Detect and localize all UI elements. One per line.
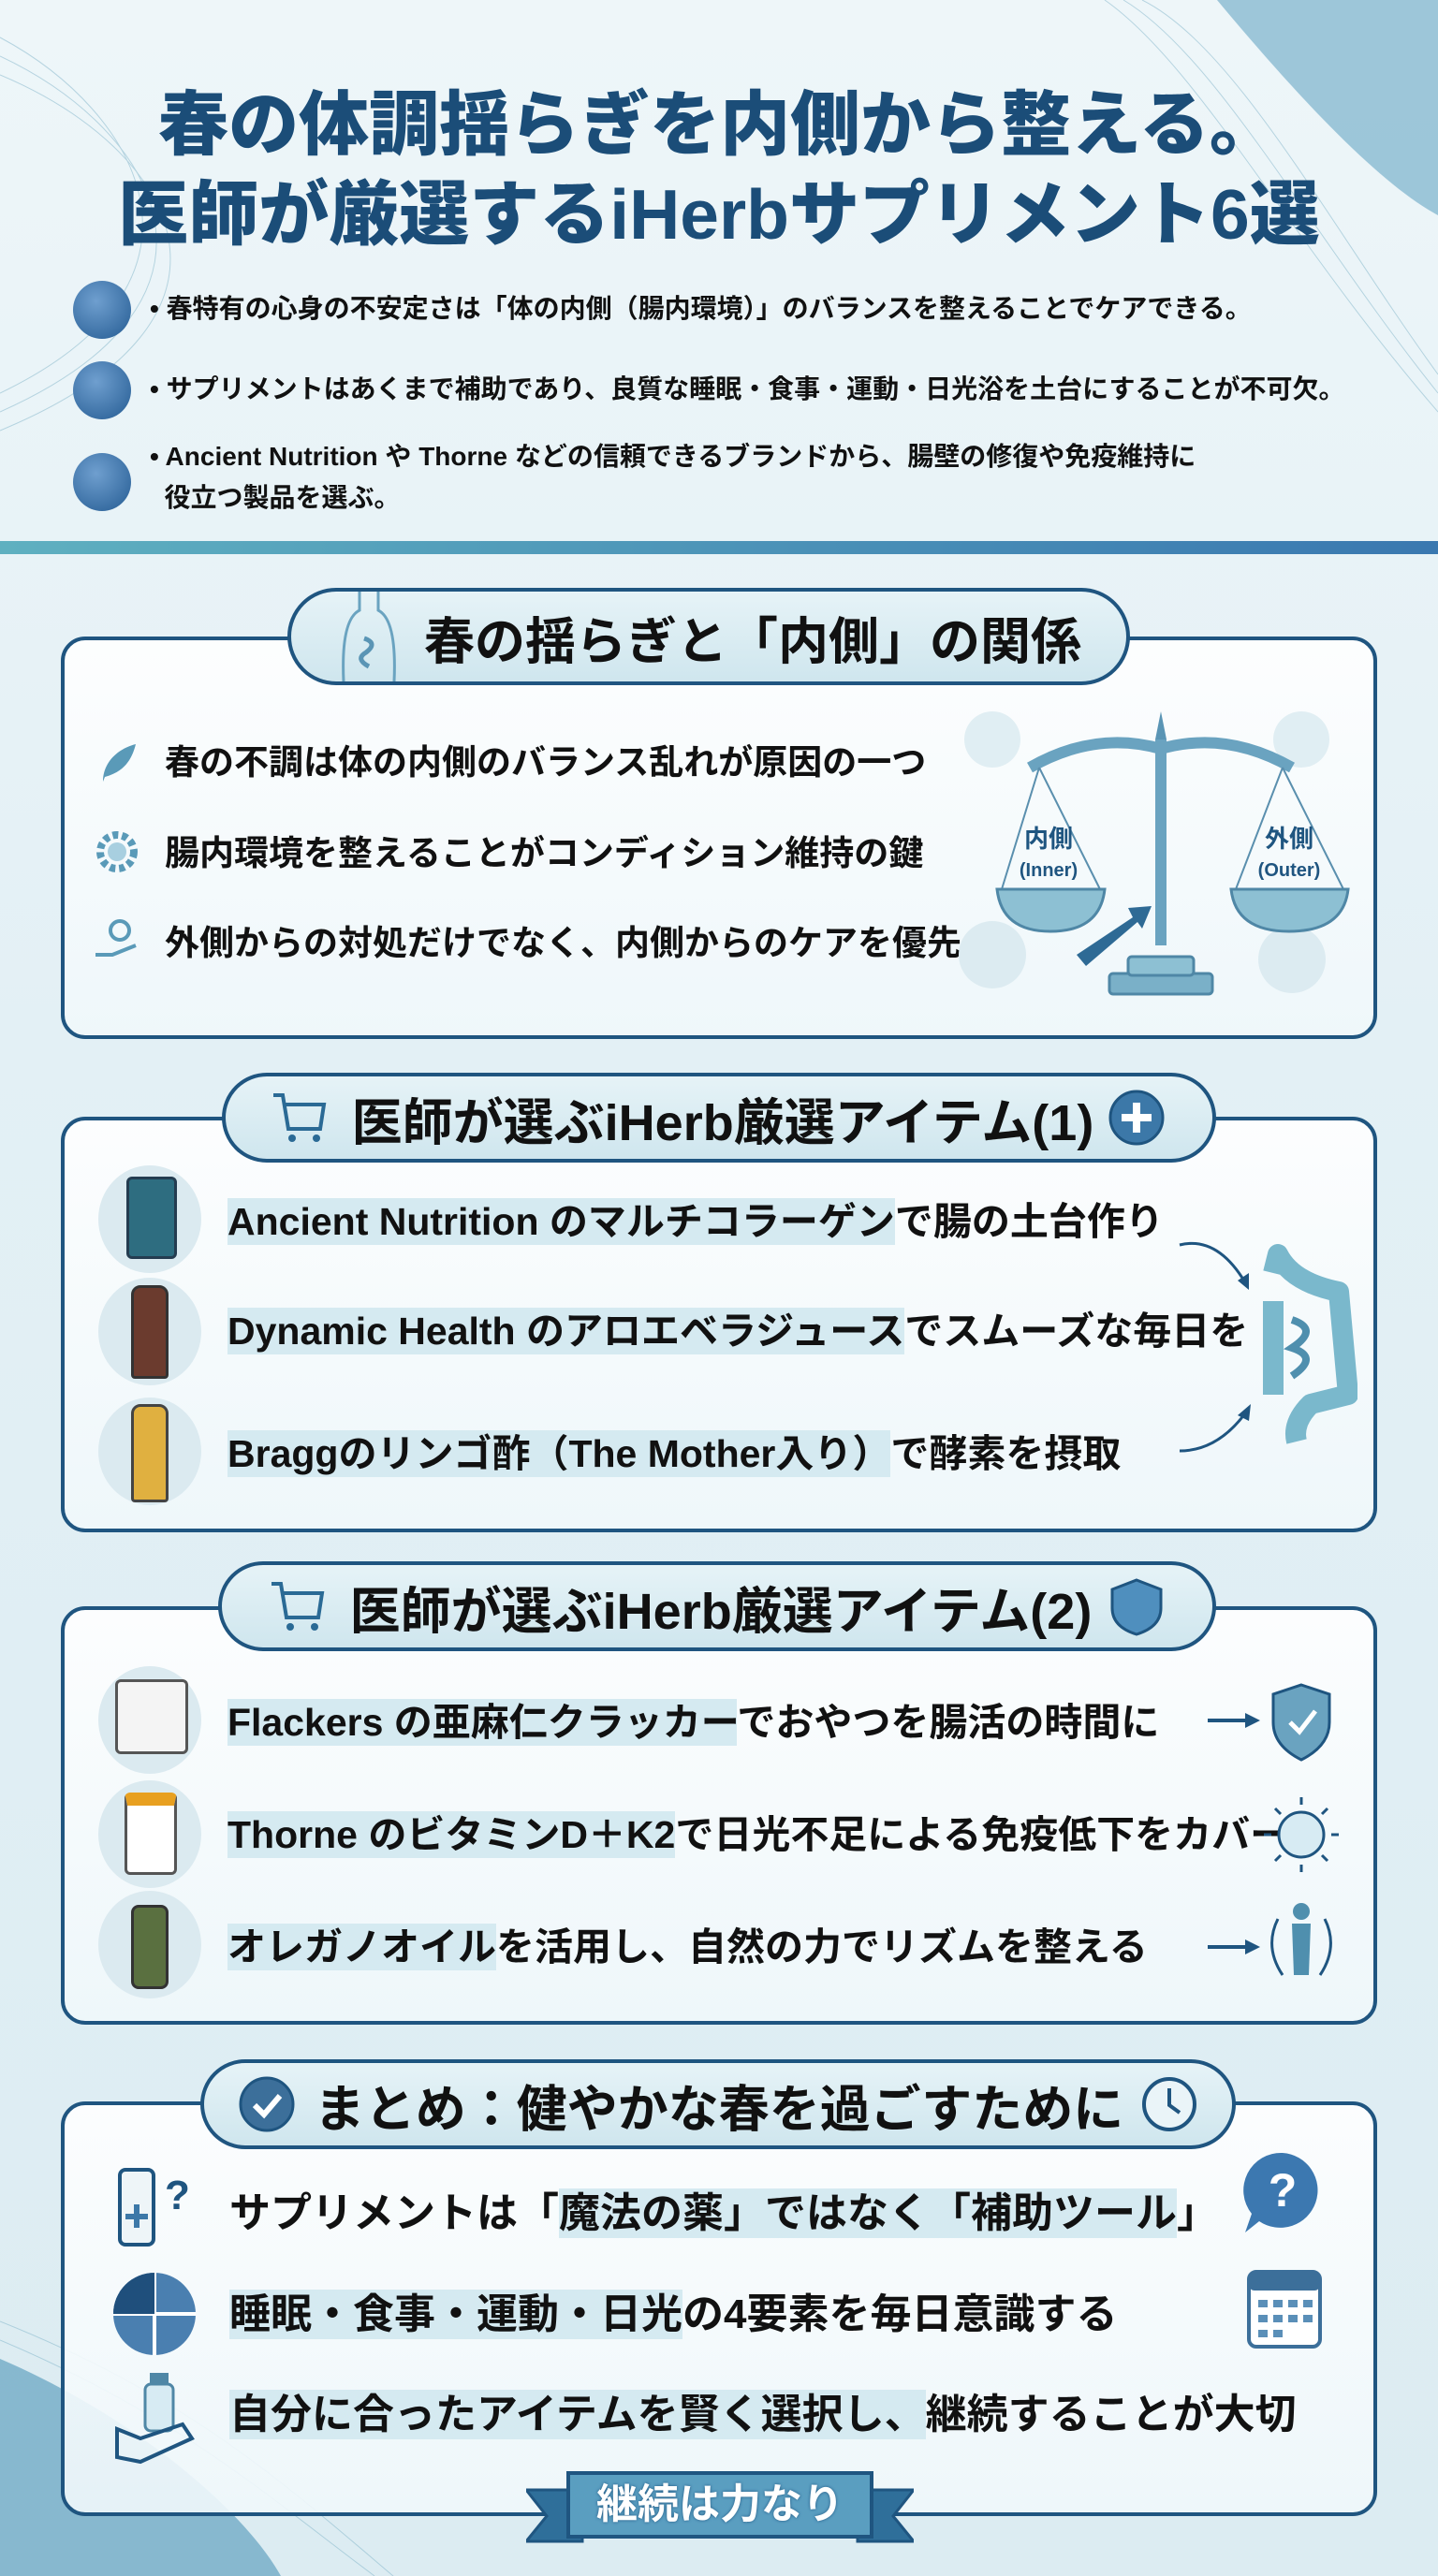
product 1 [98, 1165, 201, 1273]
summary rows [113, 2153, 1322, 2464]
icon plus [1108, 1090, 1165, 1146]
panel: items 2 [61, 1606, 1377, 2025]
heading pill 1: 春の揺らぎと「内側」の関係 [424, 614, 1081, 670]
scale illustration: 内側 [1024, 825, 1073, 853]
bullet 3: • Ancient Nutrition や Thorne などの信頼できるブランドから、腸壁の修復や免疫維持に [150, 442, 1196, 471]
rows panel 1 [95, 743, 961, 962]
icon gear [96, 831, 138, 872]
icon cart [273, 1093, 326, 1142]
scale illustration: (Outer) [1258, 860, 1320, 881]
heading pill 2 [222, 1073, 1216, 1163]
heading pill 2: 医師が選ぶiHerb厳選アイテム(1) [352, 1095, 1093, 1151]
text row 2: 腸内環境を整えることがコンディション維持の鍵 [165, 834, 923, 872]
panel: summary [61, 2101, 1377, 2516]
icon speech question [1243, 2153, 1318, 2232]
text row 1: 春の不調は体の内側のバランス乱れが原因の一つ [165, 743, 926, 782]
panel: inner relation [61, 637, 1377, 1039]
icon speech question: ? [1269, 2164, 1297, 2217]
text 5: Thorne のビタミンD＋K2で日光不足による免疫低下をカバー [227, 1813, 1288, 1856]
heading pill 3: 医師が選ぶiHerb厳選アイテム(2) [350, 1584, 1092, 1640]
icon shield [1110, 1578, 1163, 1636]
icon calendar [1247, 2270, 1322, 2349]
heading pill 4 [200, 2059, 1236, 2149]
product 4 [98, 1666, 201, 1774]
product 3 [98, 1398, 201, 1505]
text 6: オレガノオイルを活用し、自然の力でリズムを整える [227, 1925, 1148, 1969]
bullet 3: 役立つ製品を選ぶ。 [165, 483, 401, 512]
summary text 3: 自分に合ったアイテムを賢く選択し、継続することが大切 [229, 2392, 1297, 2437]
title: 医師が厳選するiHerbサプリメント6選 [118, 175, 1320, 254]
icon cart [271, 1582, 324, 1631]
heading pill 3 [218, 1561, 1216, 1651]
summary text 1: サプリメントは「魔法の薬」ではなく「補助ツール」 [229, 2190, 1218, 2236]
text 1: Ancient Nutrition のマルチコラーゲンで腸の土台作り [227, 1200, 1164, 1243]
icon clock [1142, 2077, 1196, 2131]
panel: items 1 [61, 1117, 1377, 1532]
icons right panel 3 [1208, 1683, 1339, 1976]
scale illustration: 外側 [1265, 825, 1313, 853]
title [118, 85, 1320, 254]
text 4: Flackers の亜麻仁クラッカーでおやつを腸活の時間に [227, 1701, 1159, 1744]
icon body [342, 592, 396, 681]
icon hand [95, 919, 137, 957]
bullet list [73, 281, 1344, 512]
icon: intestine with arrows [1180, 1241, 1357, 1453]
summary text 2: 睡眠・食事・運動・日光の4要素を毎日意識する [229, 2291, 1117, 2337]
heading pill 4: まとめ：健やかな春を過ごすために [315, 2082, 1123, 2138]
product 2 [98, 1278, 201, 1385]
scale illustration: (Inner) [1020, 860, 1078, 881]
bullet 1 [73, 281, 1252, 339]
bullet 2: • サプリメントはあくまで補助であり、良質な睡眠・食事・運動・日光浴を土台にすることが不可欠。 [150, 374, 1344, 403]
icon check [240, 2076, 294, 2132]
items 2 rows [98, 1666, 1288, 1998]
text 2: Dynamic Health のアロエベラジュースでスムーズな毎日を [227, 1310, 1248, 1353]
icon bottle question: ? [165, 2173, 190, 2218]
icon leaf [103, 744, 136, 782]
title: 春の体調揺らぎを内側から整える。 [158, 85, 1280, 164]
product 5 [98, 1780, 201, 1888]
icon bottle question [118, 2168, 190, 2247]
bullet 3 [73, 442, 1196, 512]
ribbon [526, 2471, 914, 2542]
icon 4 elements [113, 2273, 196, 2355]
icon hand bottle [115, 2373, 195, 2464]
items 1 rows [98, 1165, 1248, 1505]
bullet 1: • 春特有の心身の不安定さは「体の内側（腸内環境）」のバランスを整えることでケアできる。 [150, 294, 1252, 323]
scale illustration [959, 711, 1350, 996]
text 3: Braggのリンゴ酢（The Mother入り）で酵素を摂取 [227, 1432, 1121, 1475]
ribbon: 継続は力なり [596, 2481, 844, 2527]
header bar [0, 541, 1438, 554]
heading pill 1 [287, 588, 1130, 685]
text row 3: 外側からの対処だけでなく、内側からのケアを優先 [165, 924, 961, 962]
bullet 2 [73, 361, 1344, 419]
product 6 [98, 1891, 201, 1998]
